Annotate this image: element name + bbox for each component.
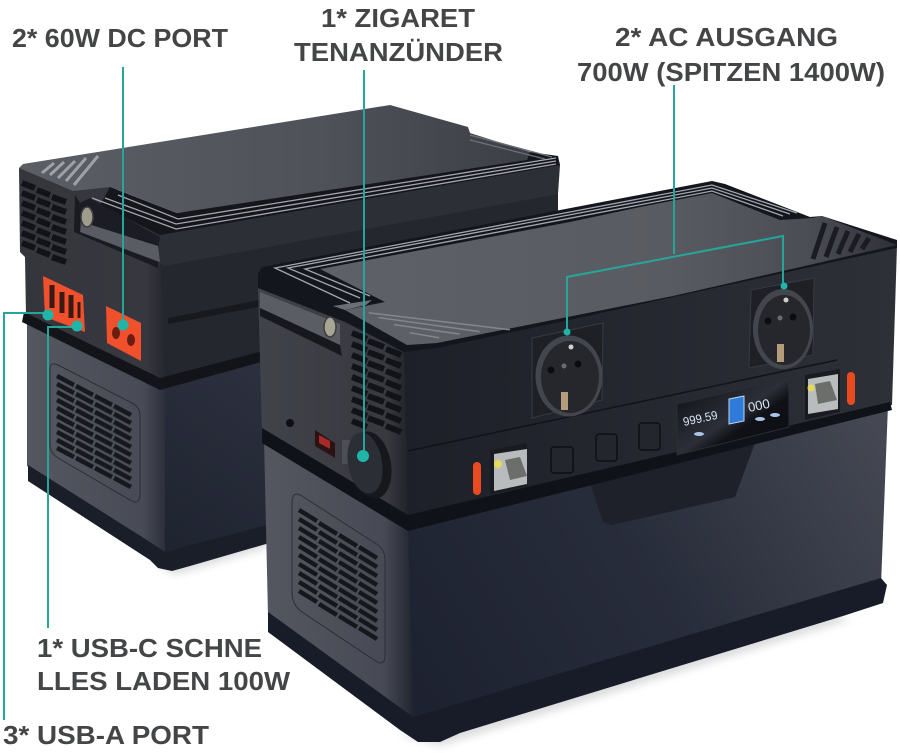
front unit lower vent (299, 510, 377, 639)
label: AC output: 700W (SPITZEN 1400W) (577, 57, 885, 87)
front unit handle (260, 292, 372, 356)
front unit lid (258, 181, 897, 352)
label: cigarette lighter: 1* ZIGARET (321, 3, 475, 33)
front power station unit (258, 181, 897, 742)
left LED light (490, 443, 527, 494)
label: 60W DC port: 2* 60W DC PORT (12, 23, 228, 53)
orange indicator right (847, 372, 855, 405)
rear unit lower vent (57, 376, 131, 487)
orange indicator left (473, 462, 481, 495)
label: cigarette lighter (294, 3, 503, 67)
DC port panel (106, 306, 141, 361)
label: USB-C fast charging (37, 633, 290, 696)
rear unit lower body (27, 320, 290, 571)
label: USB-C fast charging: LLES LADEN 100W (37, 666, 290, 696)
front unit handle button (324, 317, 336, 337)
label: AC output: 2* AC AUSGANG (615, 22, 838, 52)
AC socket right (749, 278, 814, 369)
AC socket left (532, 323, 603, 418)
control buttons (551, 423, 660, 473)
front unit upper body (258, 245, 897, 531)
rear unit side vent (22, 183, 66, 262)
callout line: USB-A (4, 310, 54, 720)
rear unit handle (74, 195, 160, 268)
front unit lower body (264, 405, 888, 742)
front unit side vent (352, 333, 401, 432)
rear unit lid (19, 105, 560, 266)
rear unit upper body (19, 168, 558, 390)
USB port panel (43, 276, 85, 332)
callout line: USB-C (48, 320, 82, 628)
label: USB-C fast charging: 1* USB-C SCHNE (37, 633, 262, 663)
callout line: AC outlets (564, 85, 788, 336)
label: USB-A port: 3* USB-A PORT (3, 720, 209, 750)
LCD display: 000 (747, 396, 771, 415)
callout line: DC port (118, 67, 128, 330)
rear unit handle button (81, 207, 93, 227)
rear power station unit (19, 105, 560, 571)
callout line: cigarette lighter (357, 70, 369, 462)
label: AC output (577, 22, 885, 87)
label: cigarette lighter: TENANZÜNDER (294, 37, 503, 67)
side switch and jack (286, 419, 335, 458)
cigarette lighter socket (342, 428, 397, 502)
LCD display (677, 378, 789, 455)
ground shadows (150, 535, 850, 746)
right LED light (805, 369, 840, 420)
LCD display: 999.59 (682, 408, 719, 429)
